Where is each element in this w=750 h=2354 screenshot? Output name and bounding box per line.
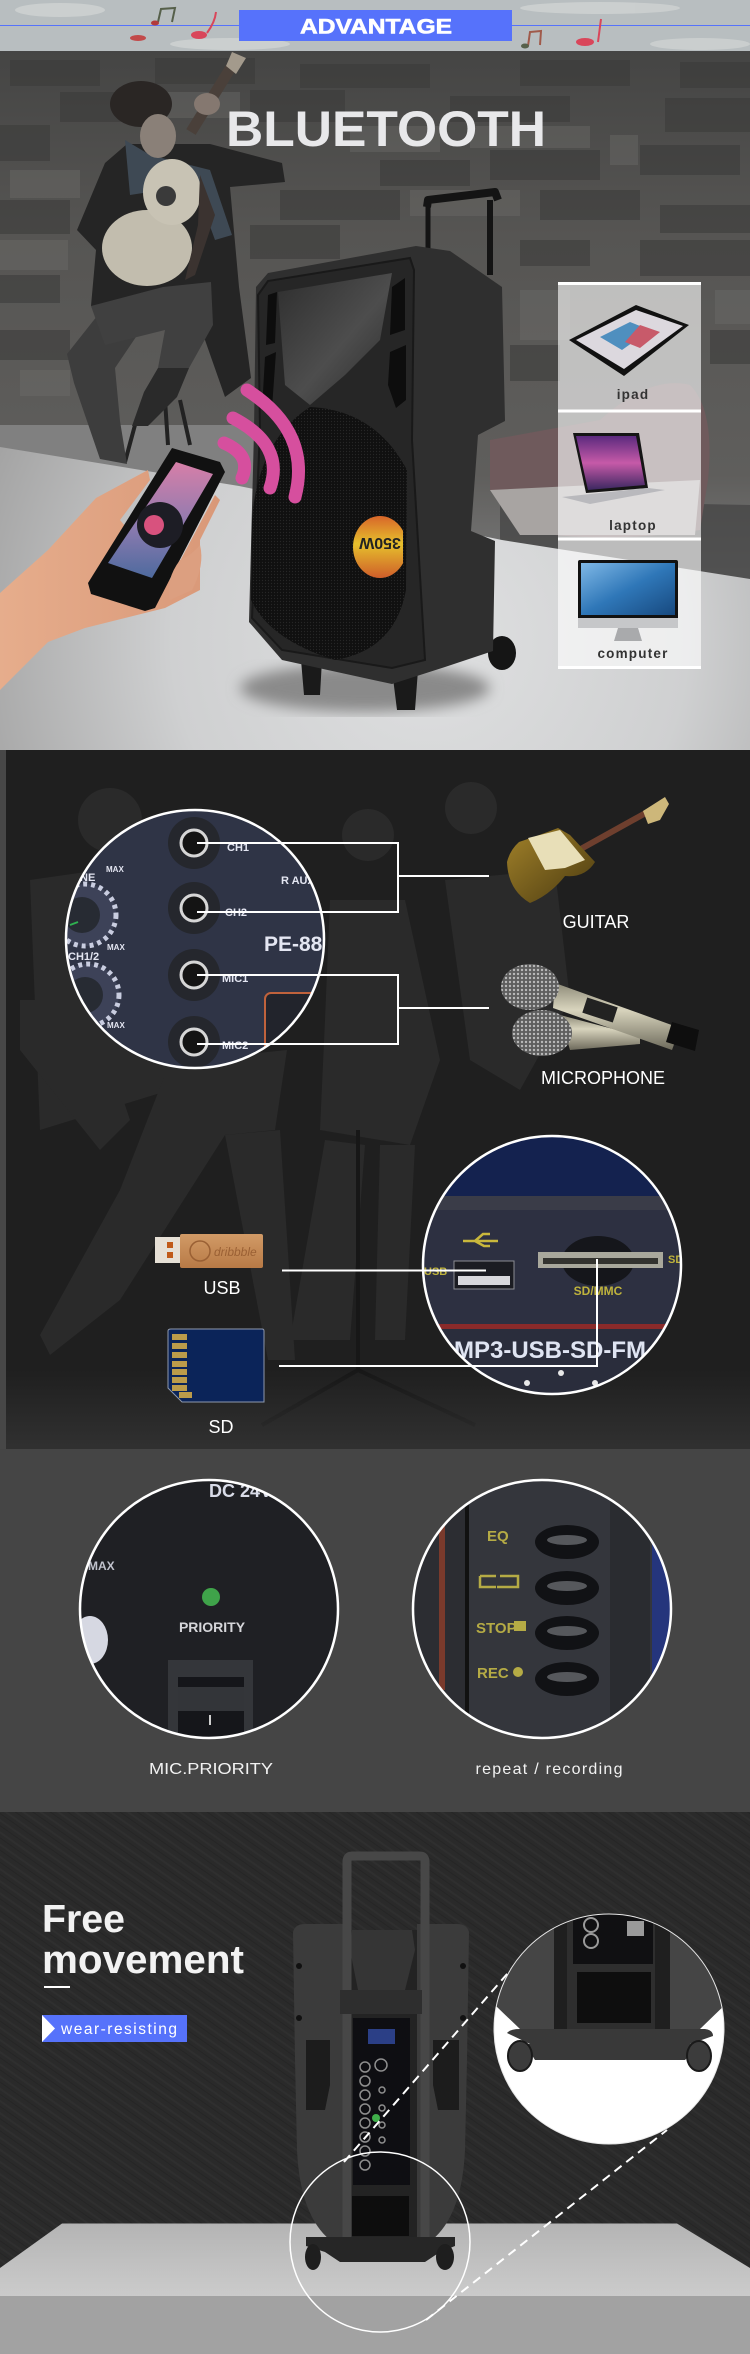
wheel base	[507, 2029, 713, 2060]
heading: free movement: Free	[42, 1898, 125, 1941]
title: bluetooth: BLUETOOTH	[226, 101, 546, 157]
panel: controls	[0, 1449, 750, 1812]
jacks	[168, 817, 220, 1068]
heading rule	[44, 1986, 70, 1988]
panel labels: CH1	[227, 842, 249, 854]
icon: usb stick	[155, 1234, 263, 1268]
heading: free movement: movement	[42, 1938, 244, 1982]
music notes	[130, 8, 601, 48]
panel labels: NE	[80, 872, 95, 884]
side grips	[306, 2040, 459, 2110]
button highlights	[547, 1535, 587, 1682]
usb port	[454, 1261, 514, 1289]
icon: microphones	[501, 964, 699, 1056]
label: repeat recording: repeat / recording	[476, 1761, 622, 1778]
orange outlined block	[264, 992, 312, 1046]
device panel	[558, 283, 701, 668]
connector: sd	[279, 1259, 597, 1366]
signal waves	[224, 390, 299, 497]
guitar head	[226, 52, 246, 74]
panel labels: CH2	[225, 907, 247, 919]
hand	[194, 93, 220, 115]
icon: tablet	[569, 305, 689, 376]
connector: guitar inputs	[197, 843, 489, 912]
speaker	[249, 246, 505, 684]
label: mp3-usb-sd-fm: MP3-USB-SD-FM	[454, 1337, 646, 1364]
zoom circle: wheels	[490, 1914, 730, 2144]
header strip	[0, 0, 750, 51]
panel labels: MAX	[107, 943, 125, 952]
speaker rear view	[293, 1856, 469, 2270]
top box	[350, 1930, 415, 1990]
horn box	[577, 1972, 651, 2023]
label: mic priority: MIC.PRIORITY	[149, 1761, 273, 1778]
power badge	[353, 516, 407, 578]
hand	[0, 470, 220, 690]
stage glow	[6, 1370, 750, 1449]
shell left	[496, 1928, 554, 2029]
speaker rear wheel	[488, 636, 516, 670]
label: computer: computer	[597, 646, 669, 661]
dashed zoom lines	[344, 1966, 667, 2320]
speaker feet	[301, 660, 418, 710]
mic stand	[262, 1130, 475, 1425]
thumb and fingers	[169, 545, 201, 600]
control panel	[353, 2018, 410, 2185]
guitar body	[102, 159, 215, 286]
label: usb side: USB	[424, 1266, 447, 1278]
guitarist	[67, 52, 285, 464]
mounting dots	[296, 1963, 466, 2021]
label: max: MAX	[88, 1559, 115, 1573]
control knobs	[360, 2059, 387, 2170]
scarf	[125, 140, 232, 240]
shell right	[670, 1932, 722, 2029]
stool	[125, 400, 190, 462]
jacket	[77, 144, 285, 397]
header banner: ADVANTAGE	[300, 16, 452, 38]
horn	[278, 273, 392, 405]
header blotches	[15, 2, 750, 50]
label: sd: SD	[208, 1417, 234, 1437]
face	[140, 114, 176, 158]
label: guitar: GUITAR	[563, 912, 629, 932]
input panel	[573, 1914, 653, 1964]
wheels	[305, 2244, 454, 2270]
knob fragment	[82, 1616, 108, 1664]
hair	[110, 81, 172, 127]
icon: repeat arrows	[480, 1576, 518, 1587]
icon: usb symbol	[463, 1234, 498, 1246]
album art	[144, 515, 164, 535]
handle	[347, 1856, 425, 2240]
label: laptop: laptop	[609, 518, 657, 533]
panel labels: MAX	[107, 1021, 125, 1030]
cabinet	[249, 246, 505, 684]
tag: wear-resisting: wear-resisting	[60, 2021, 177, 2038]
panel labels: R AUX	[281, 875, 315, 887]
brick wall background	[0, 51, 750, 585]
back leg	[67, 306, 144, 464]
header rule	[0, 24, 750, 26]
round sockets	[584, 1918, 598, 1948]
phone screen	[108, 462, 213, 578]
usb port tongue	[458, 1276, 510, 1285]
side vents	[262, 278, 406, 410]
label: priority: PRIORITY	[179, 1619, 246, 1635]
highlight circle	[290, 2152, 470, 2332]
button labels: REC	[477, 1665, 509, 1682]
speaker handle	[427, 192, 498, 275]
wheels	[508, 2041, 711, 2071]
label: ipad: ipad	[617, 387, 649, 402]
led	[202, 1588, 220, 1606]
panel labels: MIC2	[222, 1040, 248, 1052]
label: sd side: SD	[668, 1254, 683, 1266]
wheel base	[306, 2237, 455, 2262]
centre column	[567, 1920, 655, 2029]
panel: free movement	[0, 1812, 750, 2354]
label: sd/mmc: SD/MMC	[574, 1284, 623, 1298]
icon: usb stick: dribbble	[214, 1245, 257, 1259]
buttons	[535, 1525, 599, 1696]
button labels	[476, 1528, 526, 1682]
switch	[168, 1660, 253, 1740]
cabinet	[293, 1924, 469, 2240]
heading: free movement	[42, 1898, 244, 1982]
knobs	[67, 882, 122, 1026]
front leg	[91, 282, 213, 368]
icon: laptop	[562, 433, 665, 504]
panel labels: MAX	[106, 865, 124, 874]
icon: computer	[578, 560, 678, 641]
floor	[0, 447, 750, 750]
indicator dots	[524, 1370, 598, 1386]
button labels: EQ	[487, 1528, 509, 1545]
zoom circle: audio inputs	[54, 805, 330, 1075]
icon: electric guitar	[507, 797, 669, 903]
panel labels: MIC1	[222, 973, 248, 985]
panel: connections	[0, 750, 750, 1449]
faded band silhouettes	[20, 782, 570, 1360]
stage floor	[0, 2224, 750, 2354]
lower microphone	[560, 1015, 640, 1050]
upper microphone	[553, 983, 680, 1050]
zoom circle: usb and sd ports	[420, 1130, 685, 1400]
music disc	[137, 502, 183, 548]
boot	[132, 368, 189, 426]
guitar case	[490, 383, 710, 538]
guitar neck	[191, 56, 238, 132]
connector: usb	[282, 1270, 486, 1272]
power badge: 350W	[358, 534, 401, 551]
label: dc: DC 24V	[209, 1481, 272, 1501]
disc behind card slot	[562, 1236, 634, 1286]
bracket	[340, 1990, 422, 2014]
panel labels: PE-88	[264, 933, 323, 956]
connector: mic inputs	[197, 975, 489, 1044]
card slot opening	[543, 1258, 658, 1264]
display	[368, 2029, 395, 2044]
panel labels: CH1/2	[68, 951, 99, 963]
speaker shadow	[240, 664, 490, 712]
label: microphone: MICROPHONE	[541, 1068, 665, 1088]
icon: sd card	[168, 1329, 264, 1402]
power socket	[627, 1921, 644, 1936]
card slot	[538, 1252, 663, 1268]
centre column	[345, 1930, 417, 2240]
tag: wear-resisting	[42, 2015, 187, 2042]
hand holding phone	[0, 448, 225, 690]
zoom circle: mic priority	[72, 1479, 339, 1740]
label: usb: USB	[203, 1278, 241, 1298]
phone body	[88, 448, 225, 611]
zoom circle: repeat and record buttons	[412, 1479, 672, 1739]
button labels: STOP	[476, 1620, 517, 1637]
panel: bluetooth	[0, 0, 750, 750]
grille	[251, 407, 407, 660]
panel labels	[68, 842, 323, 1052]
rods	[554, 1914, 670, 2030]
rear horn	[352, 2196, 409, 2236]
header banner	[239, 10, 512, 41]
priority led	[372, 2114, 380, 2122]
front baffle	[252, 258, 425, 668]
